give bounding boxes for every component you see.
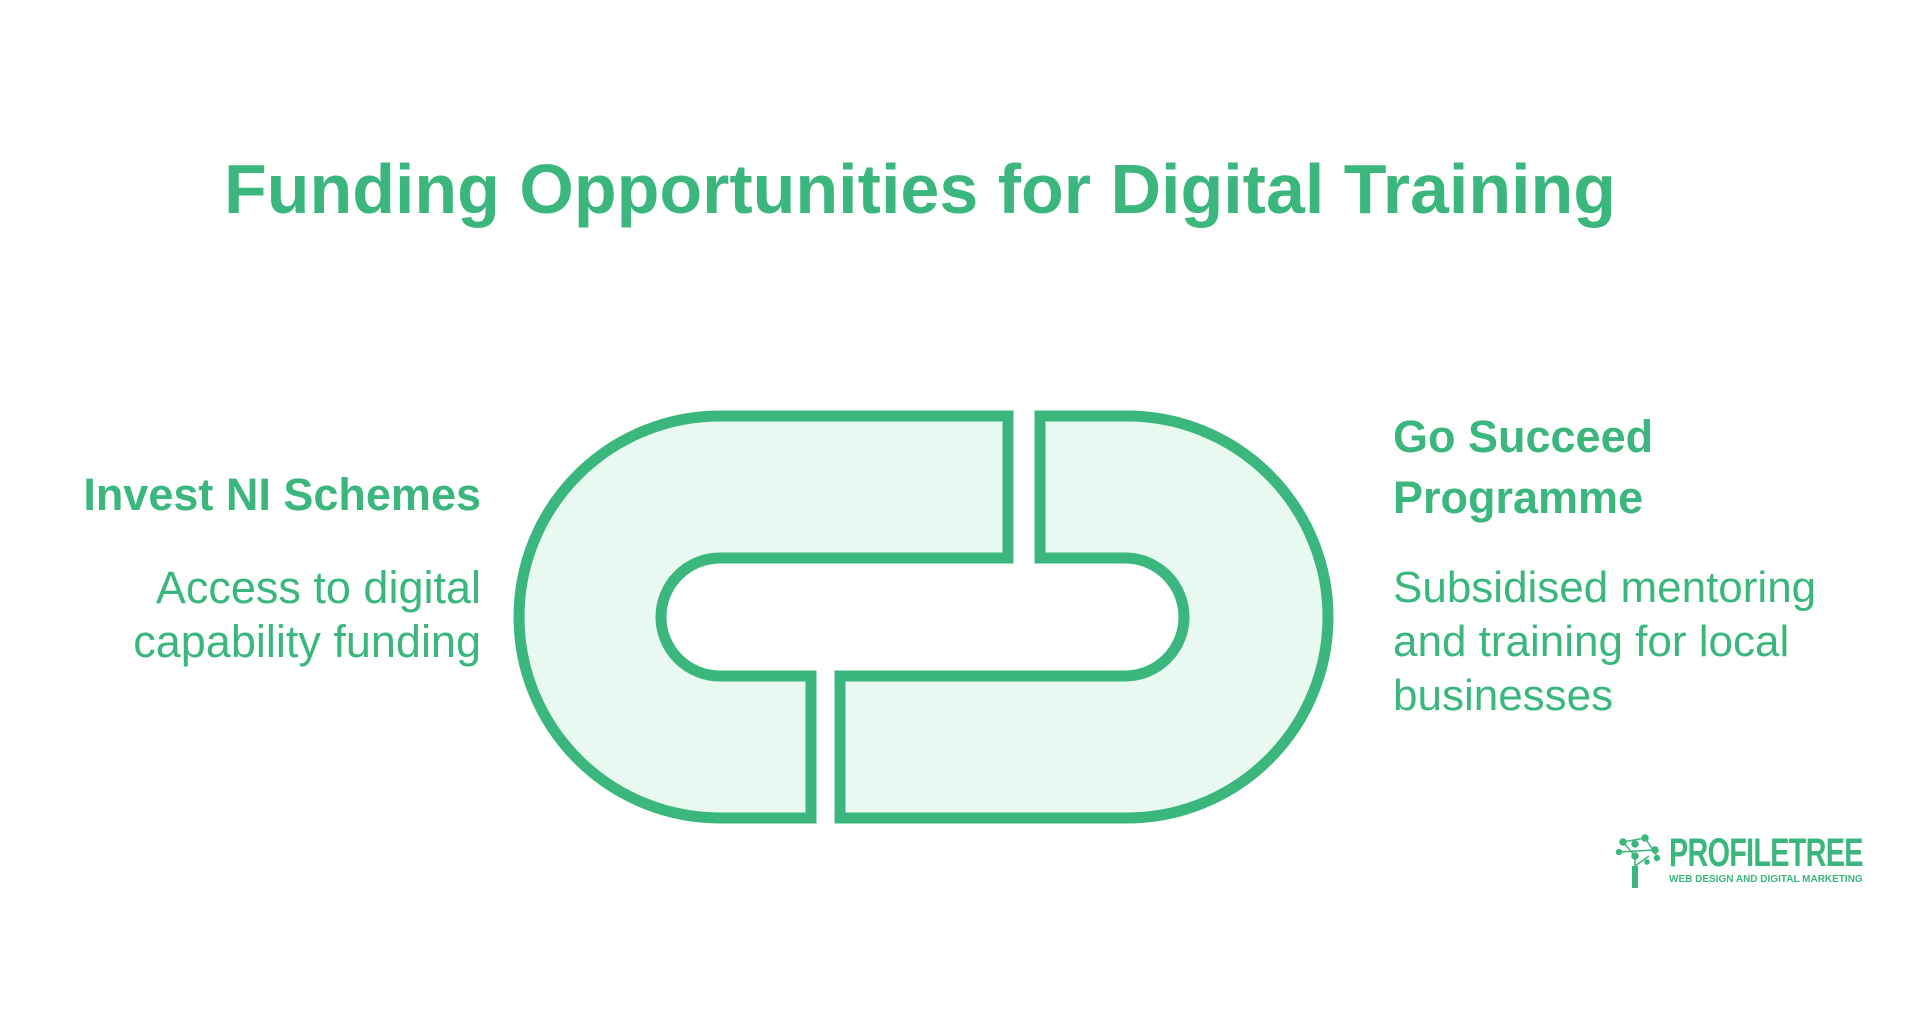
text: left description: Access to digital [156,562,481,613]
text: left description [133,562,481,667]
icon: tree [1616,834,1660,888]
text: right description [1393,563,1816,720]
logo: ProfileTree [1616,831,1863,888]
title: Funding Opportunities for Digital Training [224,150,1616,228]
heading: Go Succeed Programme: Go Succeed [1393,411,1653,462]
panel: right text [1393,411,1816,720]
logo text: PROFILETREE [1669,831,1863,875]
heading: Go Succeed Programme [1393,411,1653,523]
heading: Invest NI Schemes: Invest NI Schemes [83,469,481,520]
text: right description: Subsidised mentoring [1393,563,1816,612]
panel: left text [83,469,481,667]
logo: ProfileTree: WEB DESIGN AND DIGITAL MARKETING [1669,874,1863,885]
heading: Go Succeed Programme: Programme [1393,472,1643,523]
left link piece [519,416,1008,818]
text: right description: businesses [1393,671,1613,720]
right link piece [840,416,1328,818]
text: left description: capability funding [133,616,481,667]
text: right description: and training for local [1393,617,1789,666]
